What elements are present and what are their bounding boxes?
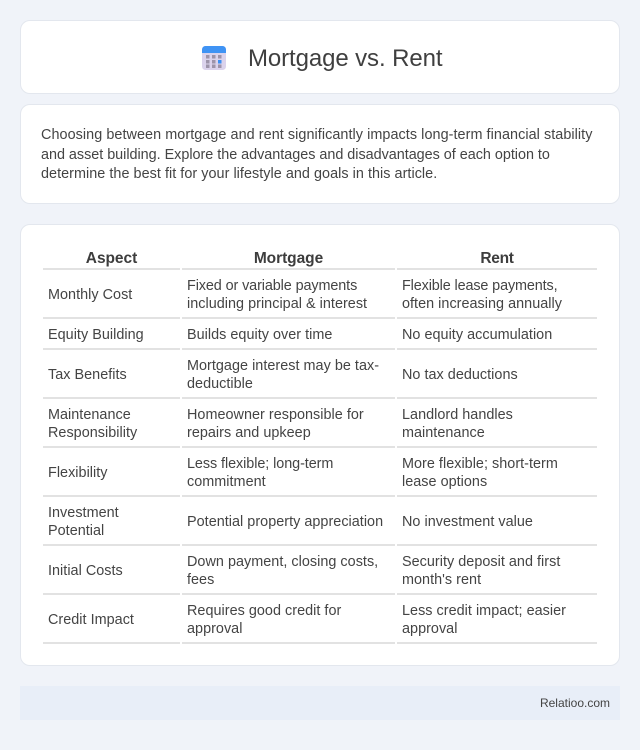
- row: Initial Costs: [43, 554, 597, 595]
- text: Less credit impact; easier: [402, 603, 566, 619]
- text: Landlord handles: [402, 407, 513, 423]
- text: including principal & interest: [187, 296, 367, 312]
- text: No tax deductions: [402, 367, 518, 383]
- text: Responsibility: [48, 425, 137, 441]
- text: No investment value: [402, 514, 533, 530]
- text: repairs and upkeep: [187, 425, 311, 441]
- footer credit: Relatioo.com: [540, 696, 610, 710]
- text: Security deposit and first: [402, 554, 560, 570]
- text: Initial Costs: [48, 563, 123, 579]
- text: Homeowner responsible for: [187, 407, 364, 423]
- text: month's rent: [402, 572, 481, 588]
- text: Mortgage: [254, 250, 323, 267]
- text: Rent: [480, 250, 514, 267]
- text: Tax Benefits: [48, 367, 127, 383]
- text block: introduction: [41, 127, 592, 182]
- text: Down payment, closing costs,: [187, 554, 378, 570]
- text block: introduction: and asset building. Explore the advantages and disadvantages of each option to: [41, 146, 550, 162]
- text: Fixed or variable payments: [187, 278, 357, 294]
- panel: comparison table: [20, 224, 620, 666]
- text: Flexible lease payments,: [402, 278, 558, 294]
- text: commitment: [187, 474, 266, 490]
- title: Mortgage vs. Rent: [248, 45, 442, 72]
- row: Flexibility: [43, 456, 597, 497]
- footer bar: [20, 686, 620, 720]
- text: More flexible; short-term: [402, 456, 558, 472]
- row: Credit Impact: [43, 603, 597, 644]
- text: Less flexible; long-term: [187, 456, 333, 472]
- row: Maintenance Responsibility: [43, 407, 597, 448]
- text: Credit Impact: [48, 612, 134, 628]
- text: Builds equity over time: [187, 327, 332, 343]
- text: Maintenance: [48, 407, 131, 423]
- comparison table: [43, 250, 597, 644]
- text: Investment: [48, 505, 119, 521]
- text: Requires good credit for: [187, 603, 341, 619]
- text: deductible: [187, 376, 253, 392]
- text: approval: [187, 621, 242, 637]
- row: Investment Potential: [43, 505, 597, 546]
- text: approval: [402, 621, 457, 637]
- text: maintenance: [402, 425, 485, 441]
- panel: title card: [20, 20, 620, 94]
- text: often increasing annually: [402, 296, 562, 312]
- text: Potential property appreciation: [187, 514, 383, 530]
- row: Monthly Cost: [43, 278, 597, 319]
- icon: calendar: [202, 46, 226, 70]
- text: Monthly Cost: [48, 287, 132, 303]
- text: Potential: [48, 523, 104, 539]
- table header: [43, 250, 597, 270]
- panel: introduction: [20, 104, 620, 204]
- text: lease options: [402, 474, 487, 490]
- text: Aspect: [86, 250, 137, 267]
- text: Mortgage interest may be tax-: [187, 358, 379, 374]
- text block: introduction: Choosing between mortgage and rent significantly impacts long-term financial stability: [41, 127, 592, 143]
- text: Equity Building: [48, 327, 144, 343]
- text: fees: [187, 572, 214, 588]
- row: Tax Benefits: [43, 358, 597, 399]
- text: Flexibility: [48, 465, 108, 481]
- text: No equity accumulation: [402, 327, 552, 343]
- row: Equity Building: [43, 327, 597, 350]
- text block: introduction: determine the best fit for your lifestyle and goals in this article.: [41, 166, 437, 182]
